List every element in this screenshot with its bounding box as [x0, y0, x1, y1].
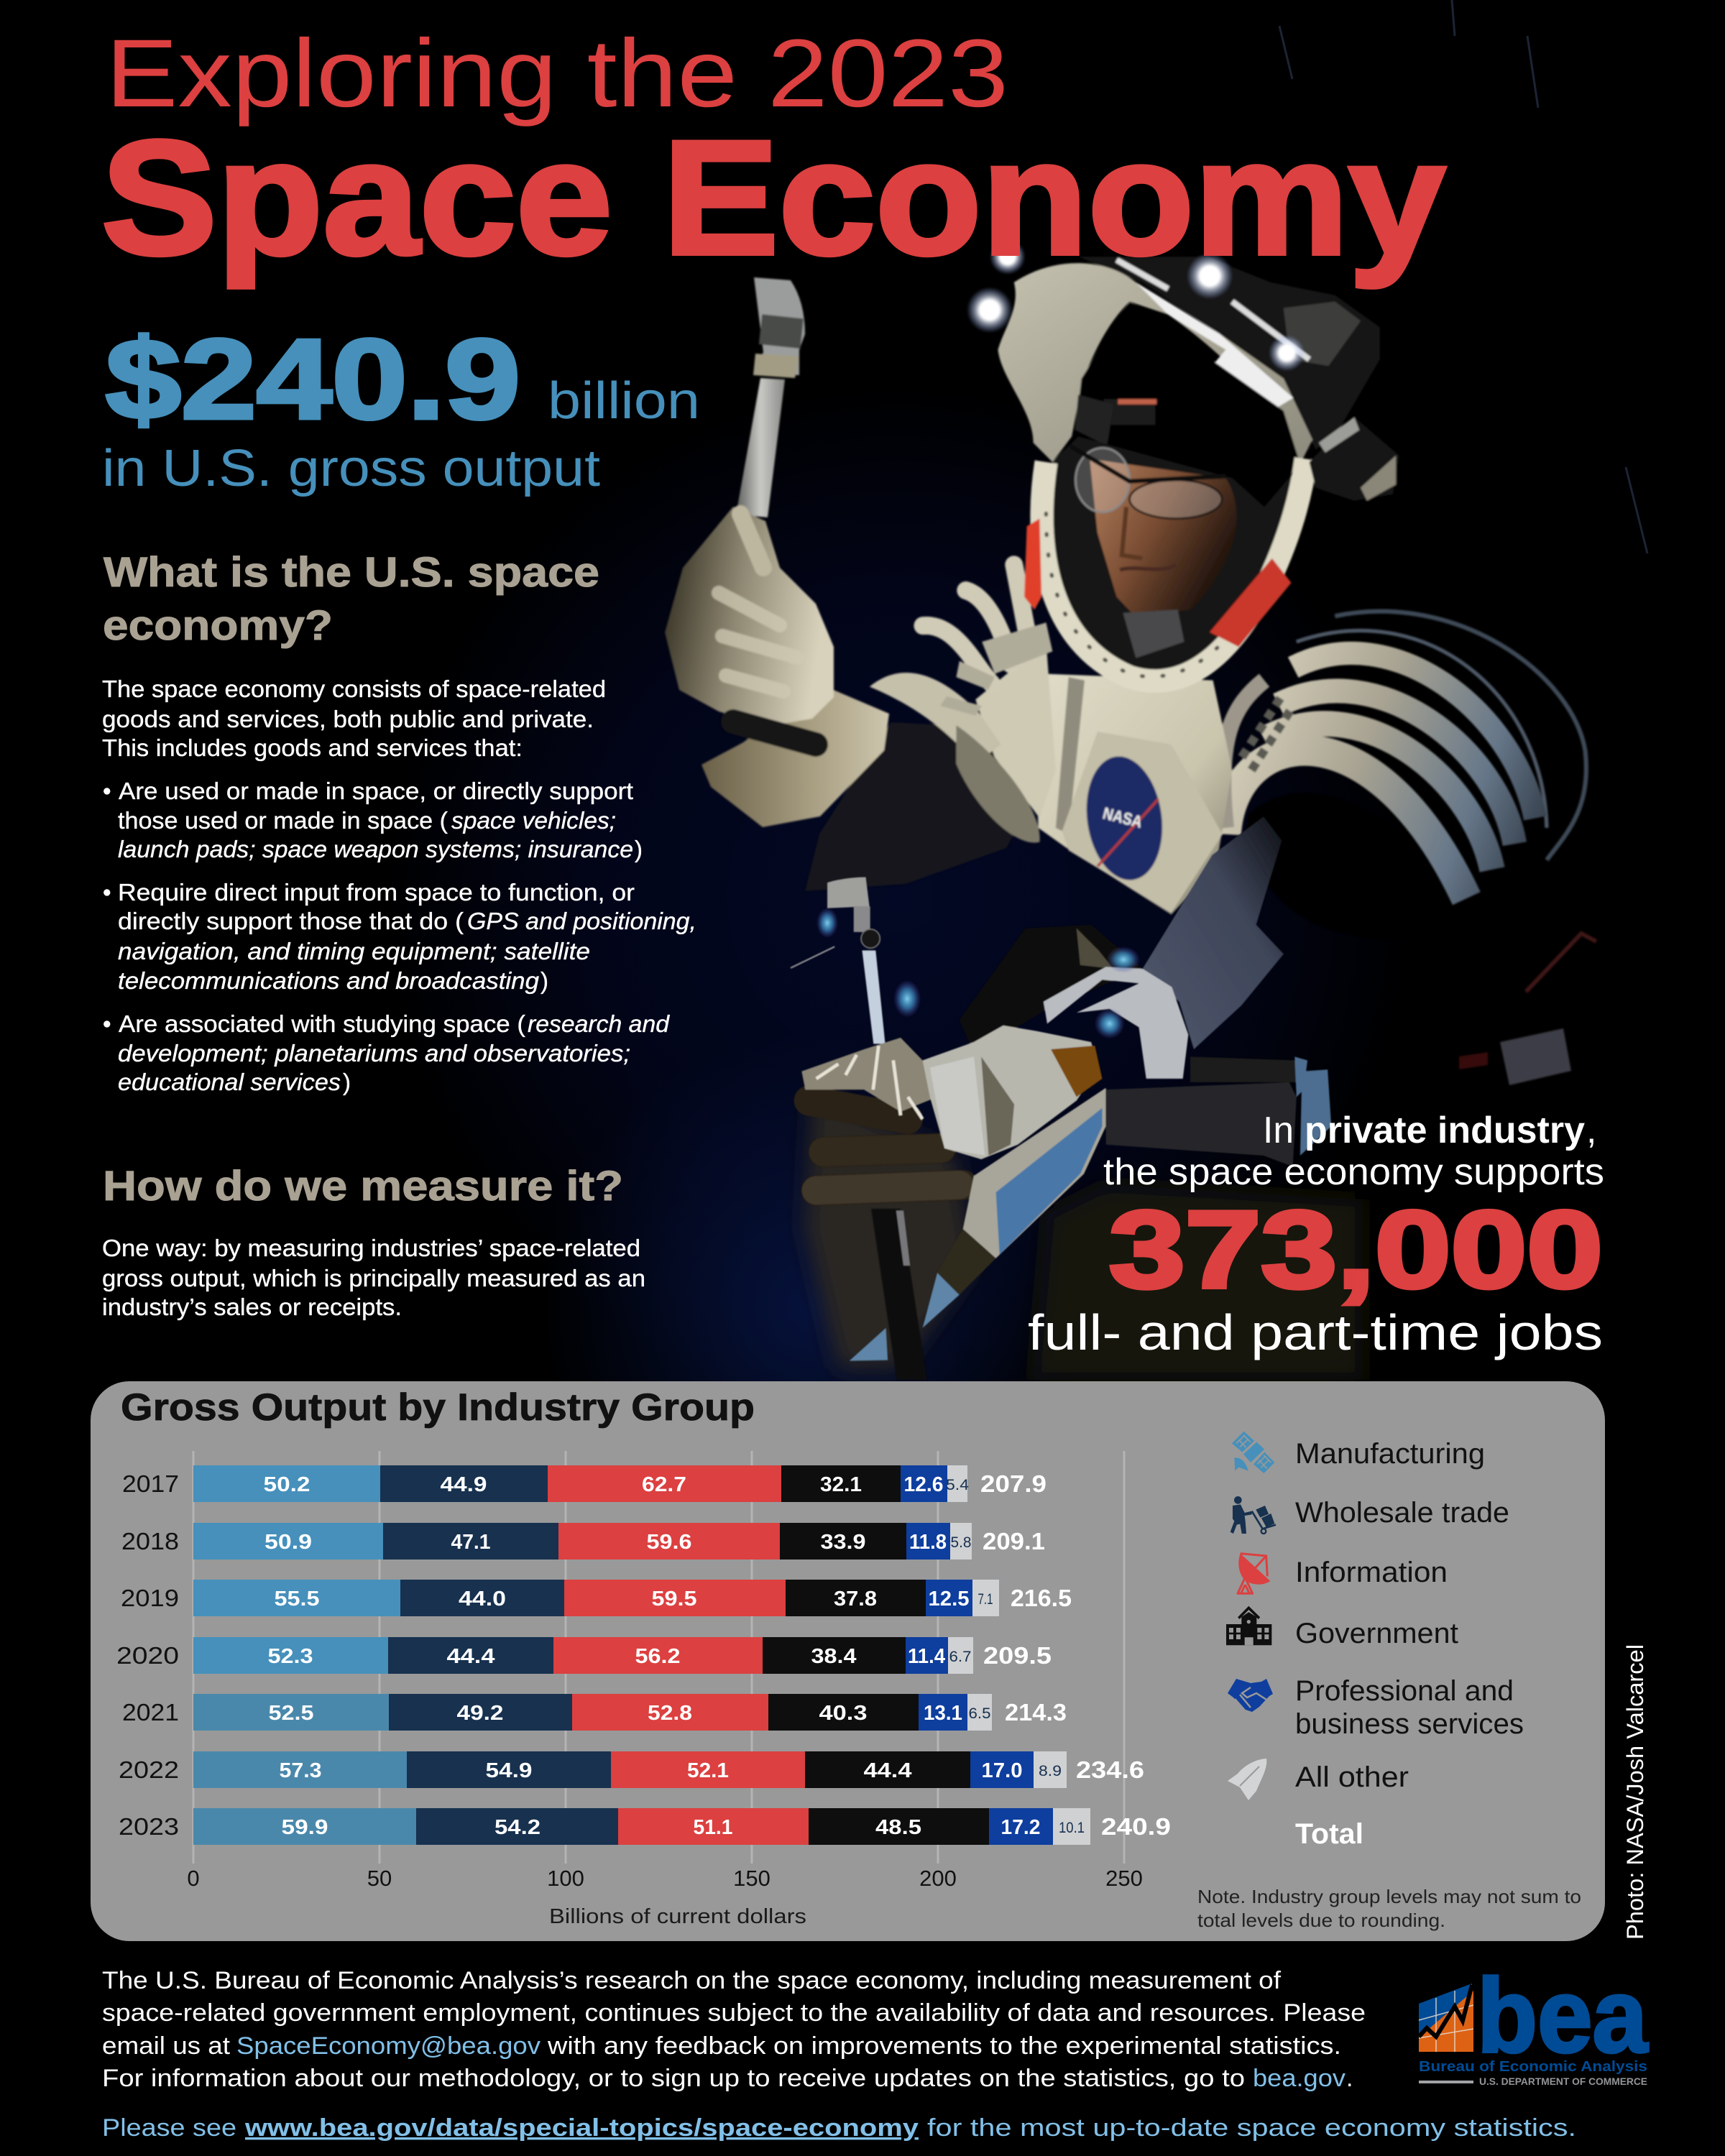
bar row: 2020 [116, 1637, 1052, 1674]
footer text: The U.S. Bureau of Economic Analysis’s research on the space economy, including measurement of [102, 1967, 1282, 1994]
x axis labels: Billions of current dollars [549, 1905, 806, 1928]
note [1197, 1886, 1581, 1931]
shoulder [975, 642, 1056, 819]
title line 2: Economy [663, 106, 1445, 288]
bullet list: launch pads; space weapon systems; insurance [118, 836, 633, 862]
bar row: 2020: 38.4 [811, 1645, 857, 1668]
text block: measurement: One way: by measuring industries’ space-related [102, 1235, 640, 1261]
bar row: 2022 [119, 1751, 1144, 1788]
x axis labels: 50 [367, 1866, 392, 1891]
bullet list: ) [343, 1069, 351, 1095]
helmet lights [967, 287, 1013, 333]
bar row: 2021: 40.3 [819, 1702, 867, 1725]
bullet list: educational services [118, 1069, 341, 1095]
footer text [102, 1967, 1366, 2092]
bar row: 2019: 216.5 [1011, 1585, 1072, 1611]
right glove [1044, 967, 1188, 1079]
bar row: 2018: 50.9 [264, 1531, 312, 1554]
bar row: 2019 [121, 1580, 1072, 1616]
bar row: 2018: 47.1 [451, 1531, 490, 1554]
title line 1: Exploring the 2023 [106, 20, 1008, 127]
text block: definition: The space economy consists of space-related [102, 676, 606, 702]
legend: Professional and [1295, 1675, 1514, 1707]
fist [809, 1101, 963, 1190]
bullet list: Are associated with studying space ( [119, 1010, 525, 1037]
legend: Total [1295, 1818, 1363, 1850]
footer text: with any feedback on improvements to the experimental statistics. [547, 2032, 1341, 2060]
bullet list: GPS and positioning, [467, 908, 696, 934]
callout: jobs: 373,000 [1109, 1189, 1603, 1311]
bar row: 2023 [119, 1808, 1171, 1845]
bar row: 2023: 240.9 [1101, 1813, 1171, 1840]
bullet list: • [103, 879, 111, 906]
bar row: 2021: 214.3 [1005, 1699, 1067, 1726]
callout: jobs: the space economy supports [1103, 1151, 1604, 1193]
bar row: 2023: 10.1 [1059, 1820, 1085, 1836]
bar row: 2020: 11.4 [908, 1645, 945, 1668]
footer text: SpaceEconomy@bea.gov [236, 2032, 540, 2060]
bullet list: research and [528, 1010, 671, 1037]
bar row: 2019: 44.0 [459, 1588, 506, 1611]
bar row: 2022: 234.6 [1076, 1756, 1144, 1783]
tool above lower hand [827, 877, 870, 908]
bullet list: space vehicles; [451, 807, 616, 834]
upper hand with hammer, cuff and sleeve [665, 277, 1042, 891]
bar row: 2023: 59.9 [282, 1816, 328, 1839]
glasses [1076, 448, 1130, 512]
bar row: 2018: 11.8 [909, 1531, 947, 1554]
bar row: 2021: 49.2 [457, 1702, 503, 1725]
icon: worker with hand truck (wholesale trade) [1230, 1496, 1276, 1534]
bullet list: directly support those that do ( [118, 908, 464, 934]
note: Note. Industry group levels may not sum to [1197, 1886, 1581, 1907]
bullet list [103, 778, 696, 1095]
bar row: 2022: 57.3 [279, 1759, 322, 1782]
bar row: 2023: 51.1 [693, 1816, 733, 1839]
bar row: 2017 [122, 1465, 1046, 1502]
icon: space shuttle (all other) [1228, 1759, 1266, 1800]
bar row: 2022: 17.0 [982, 1759, 1022, 1782]
legend: Information [1295, 1557, 1448, 1588]
NASA lettering on patch: NASA [1101, 803, 1144, 831]
bar row: 2018: 5.8 [950, 1534, 972, 1551]
logo: Bureau of Economic Analysis: Bureau of Economic Analysis [1419, 2059, 1647, 2075]
logo: Bureau of Economic Analysis: U.S. DEPARTMENT OF COMMERCE [1479, 2076, 1647, 2087]
heading: what is the space economy: economy? [103, 602, 333, 649]
x axis labels: 200 [919, 1866, 957, 1891]
x axis labels [187, 1866, 1143, 1928]
bar row: 2022: 44.4 [864, 1759, 911, 1782]
text block: measurement: industry’s sales or receipts. [102, 1294, 402, 1320]
helmet, face and torso [870, 239, 1586, 939]
bullet list: • [103, 778, 111, 804]
bullet list: Require direct input from space to function, or [118, 879, 635, 906]
heading: what is the space economy: What is the U.S. space [104, 549, 599, 596]
bar row: 2020: 52.3 [267, 1645, 313, 1668]
bar row: 2023: 48.5 [875, 1816, 921, 1839]
bar row: 2020: 209.5 [983, 1642, 1052, 1669]
bar row: 2017: 32.1 [820, 1473, 862, 1496]
bar row: 2017: 44.9 [440, 1473, 487, 1496]
legend [1226, 1432, 1524, 1850]
bar row: 2021: 52.8 [648, 1702, 692, 1725]
x axis labels: 100 [547, 1866, 584, 1891]
bar row: 2021: 2021 [122, 1699, 179, 1726]
lower hands, book and tool [791, 816, 1331, 1380]
bullet list: ) [635, 836, 643, 862]
bar row: 2017: 12.6 [904, 1473, 943, 1496]
bar row: 2019: 37.8 [834, 1588, 877, 1611]
footer link line: Please see [102, 2114, 236, 2142]
bar row: 2017: 2017 [122, 1470, 179, 1497]
footer text: bea.gov [1253, 2065, 1346, 2092]
x axis labels: 250 [1105, 1866, 1143, 1891]
callout: jobs [1028, 1110, 1604, 1360]
heading: what is the space economy [103, 549, 599, 649]
neck ring [1041, 459, 1306, 681]
legend: business services [1295, 1708, 1524, 1740]
bullet list: those used or made in space ( [118, 807, 448, 834]
red blocks [1024, 519, 1041, 609]
bar row: 2022: 2022 [119, 1756, 179, 1783]
bar row: 2022: 54.9 [486, 1759, 532, 1782]
legend: Manufacturing [1295, 1438, 1485, 1470]
photo credit: Photo: NASA/Josh Valcarcel [1622, 1644, 1648, 1940]
text block: measurement [102, 1235, 645, 1320]
title line 2: Space [101, 106, 612, 288]
bar row: 2017: 50.2 [263, 1473, 310, 1496]
note: total levels due to rounding. [1197, 1909, 1445, 1931]
text block: definition: goods and services, both public and private. [102, 706, 594, 732]
text block: definition: This includes goods and services that: [102, 734, 523, 761]
arm ring bands [1223, 612, 1586, 898]
lower rod [871, 1209, 927, 1380]
title [101, 20, 1445, 288]
bar row: 2017: 207.9 [980, 1470, 1046, 1497]
bar row: 2023: 2023 [119, 1813, 179, 1840]
logo: Bureau of Economic Analysis: bea [1477, 1957, 1649, 2074]
title line 2 [101, 106, 1445, 288]
footer text: . [1346, 2065, 1353, 2092]
bar row: 2017: 62.7 [642, 1473, 686, 1496]
callout: jobs: private industry [1305, 1110, 1585, 1151]
helmet shell and chrome top [1078, 257, 1380, 449]
hardware at right edge of photo [1459, 934, 1596, 1085]
logo chart mark [1419, 1984, 1473, 2052]
bar row: 2019: 2019 [121, 1585, 179, 1611]
bullet list: • [103, 1010, 111, 1037]
blue glints [816, 908, 838, 939]
footer text: space-related government employment, continues subject to the availability of data and resources. Please [102, 1999, 1366, 2027]
bar row: 2021 [122, 1694, 1067, 1731]
icon: satellite dish (information) [1238, 1554, 1270, 1593]
bar row: 2022: 52.1 [687, 1759, 729, 1782]
headline figure: billion [548, 372, 700, 430]
bar row: 2019: 55.5 [275, 1588, 319, 1611]
bullet list: telecommunications and broadcasting [118, 967, 540, 994]
bar row: 2020: 44.4 [447, 1645, 494, 1668]
torso [1034, 674, 1232, 915]
icon: government building [1226, 1608, 1271, 1645]
heading: how do we measure it: How do we measure it? [103, 1163, 623, 1210]
legend: Government [1295, 1618, 1458, 1649]
bullet list: Are used or made in space, or directly support [119, 778, 633, 804]
bar row: 2023: 17.2 [1000, 1816, 1041, 1839]
bullet list: ) [540, 967, 548, 994]
legend: Wholesale trade [1295, 1497, 1509, 1529]
bar row: 2020: 6.7 [949, 1649, 972, 1665]
photo: astronaut in a spacesuit working with tools [0, 0, 1725, 1387]
icon: satellite (manufacturing) [1232, 1432, 1274, 1473]
footer link line: for the most up-to-date space economy statistics. [927, 2114, 1576, 2142]
light glove fabric [923, 1026, 1098, 1159]
x axis labels: 0 [187, 1866, 200, 1891]
bar row: 2019: 7.1 [978, 1591, 993, 1608]
bar row: 2018: 209.1 [983, 1528, 1045, 1554]
bar row: 2017: 5.4 [946, 1477, 969, 1493]
legend: All other [1295, 1761, 1409, 1793]
footer link line: www.bea.gov/data/special-topics/space-economy [244, 2114, 919, 2142]
bullet list: development; planetariums and observatories; [118, 1040, 630, 1067]
bar row: 2020: 2020 [116, 1642, 179, 1669]
bar row: 2019: 59.5 [651, 1588, 697, 1611]
chart heading: Gross Output by Industry Group [121, 1386, 755, 1429]
NASA patch [1062, 732, 1223, 913]
callout: jobs: In [1263, 1110, 1294, 1151]
face [1090, 459, 1237, 617]
bar row: 2018: 2018 [121, 1528, 179, 1554]
footer link line [102, 2114, 1576, 2142]
footer text: For information about our methodology, or to sign up to receive updates on the statistics, go to [102, 2065, 1245, 2092]
bar row: 2021: 52.5 [269, 1702, 313, 1725]
bar row: 2018: 59.6 [647, 1531, 691, 1554]
callout: jobs: , [1586, 1110, 1596, 1151]
bar row: 2018: 33.9 [821, 1531, 865, 1554]
bar row: 2020: 56.2 [635, 1645, 680, 1668]
callout: jobs: full- and part-time jobs [1028, 1304, 1603, 1360]
icon: handshake (professional services) [1228, 1679, 1273, 1712]
book [963, 1088, 1106, 1258]
text block: measurement: gross output, which is principally measured as an [102, 1265, 645, 1291]
bar row: 2019: 12.5 [929, 1588, 969, 1611]
visor opening [1048, 436, 1300, 673]
x axis labels: 150 [733, 1866, 770, 1891]
headline figure: $240.9 [106, 316, 520, 443]
bullet list: navigation, and timing equipment; satellite [118, 938, 590, 964]
bar row: 2023: 54.2 [494, 1816, 540, 1839]
grey sleeve [1143, 816, 1284, 1049]
logo: Bureau of Economic Analysis [1419, 1957, 1649, 2087]
headline figure [102, 316, 700, 497]
bar row: 2022: 8.9 [1039, 1763, 1062, 1779]
bar row: 2021: 13.1 [924, 1702, 962, 1725]
bar row: 2018 [121, 1523, 1045, 1560]
panel: gross output chart [91, 1381, 1605, 1941]
bar row: 2021: 6.5 [969, 1705, 990, 1722]
headline figure: in U.S. gross output [102, 440, 600, 497]
text block: definition [102, 676, 606, 761]
hood [1076, 302, 1300, 507]
soft dark body shapes behind lower hands [805, 1089, 1363, 1380]
footer text: email us at [102, 2032, 231, 2060]
